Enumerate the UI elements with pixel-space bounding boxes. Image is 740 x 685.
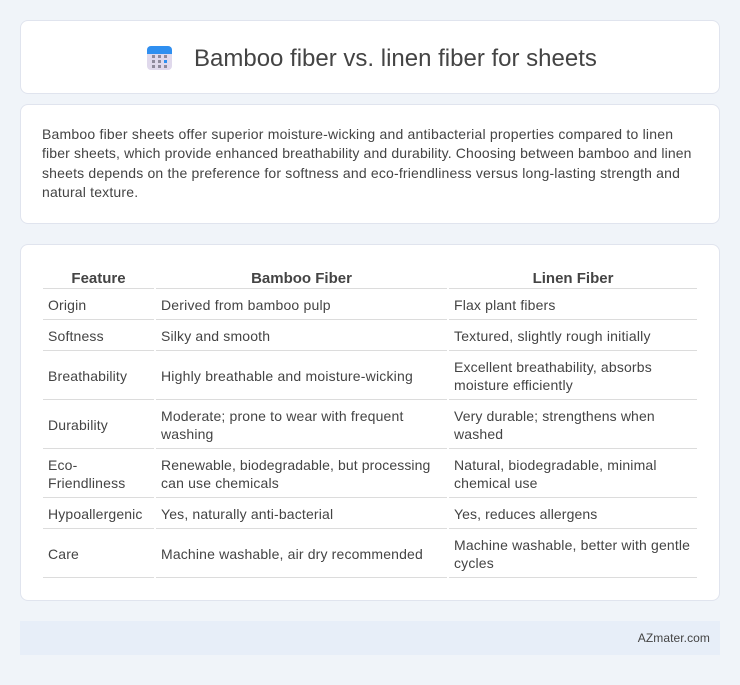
icon: calendar xyxy=(147,46,172,70)
comparison table: Eco- xyxy=(48,457,77,473)
summary text: fiber sheets, which provide enhanced breathability and durability. Choosing between bamboo and linen xyxy=(42,145,692,161)
comparison table: Origin xyxy=(48,297,86,313)
comparison table: Silky and smooth xyxy=(161,328,270,344)
comparison table: Friendliness xyxy=(48,475,125,491)
comparison table: Yes, reduces allergens xyxy=(454,506,597,522)
comparison table: washed xyxy=(454,426,503,442)
comparison table: cycles xyxy=(454,555,494,571)
comparison table: can use chemicals xyxy=(161,475,279,491)
comparison table: Highly breathable and moisture-wicking xyxy=(161,368,413,384)
comparison table: moisture efficiently xyxy=(454,377,573,393)
footer bar xyxy=(20,621,720,655)
comparison table: chemical use xyxy=(454,475,538,491)
table card xyxy=(20,244,720,601)
comparison table: Machine washable, air dry recommended xyxy=(161,546,423,562)
comparison table: Very durable; strengthens when xyxy=(454,408,655,424)
table header: Linen Fiber xyxy=(533,270,613,287)
title: Bamboo fiber vs. linen fiber for sheets xyxy=(194,45,597,72)
comparison table: Breathability xyxy=(48,368,127,384)
summary text: sheets depends on the preference for softness and eco-friendliness versus long-lasting strength and xyxy=(42,165,680,181)
comparison table: Textured, slightly rough initially xyxy=(454,328,651,344)
comparison table: Care xyxy=(48,546,79,562)
table header xyxy=(43,270,697,289)
comparison table: Softness xyxy=(48,328,104,344)
summary card xyxy=(20,104,720,224)
summary text xyxy=(42,126,692,200)
comparison table: Flax plant fibers xyxy=(454,297,556,313)
comparison table: Derived from bamboo pulp xyxy=(161,297,331,313)
comparison table: washing xyxy=(161,426,214,442)
footer credit: AZmater.com xyxy=(638,631,710,645)
summary text: natural texture. xyxy=(42,184,138,200)
comparison table: Renewable, biodegradable, but processing xyxy=(161,457,430,473)
comparison table xyxy=(43,270,697,578)
comparison table: Hypoallergenic xyxy=(48,506,143,522)
comparison table: Natural, biodegradable, minimal xyxy=(454,457,657,473)
title card xyxy=(20,20,720,94)
comparison table: Moderate; prone to wear with frequent xyxy=(161,408,404,424)
comparison table: Durability xyxy=(48,417,108,433)
table header: Bamboo Fiber xyxy=(251,270,352,287)
comparison table: Yes, naturally anti-bacterial xyxy=(161,506,333,522)
summary text: Bamboo fiber sheets offer superior moisture-wicking and antibacterial properties compared to linen xyxy=(42,126,673,142)
comparison table: Machine washable, better with gentle xyxy=(454,537,690,553)
comparison table: Excellent breathability, absorbs xyxy=(454,359,652,375)
table header: Feature xyxy=(71,270,126,287)
